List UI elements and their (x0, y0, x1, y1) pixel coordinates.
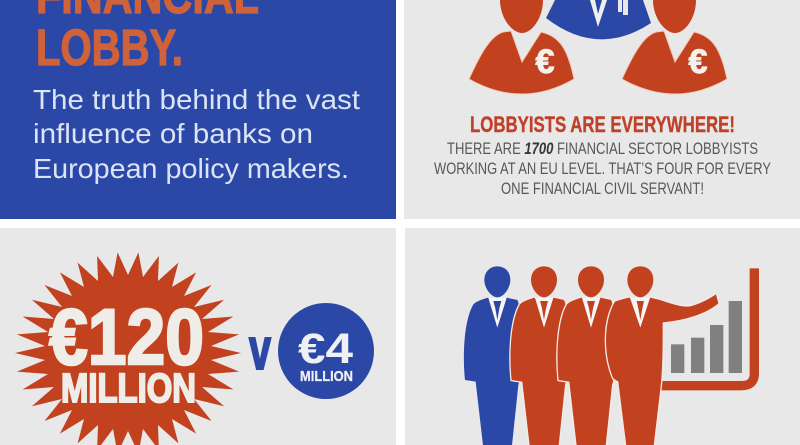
circle: 4 million: MILLION (300, 368, 353, 385)
figures and chart drawing (464, 266, 754, 445)
figure: red lobbyist presenting (606, 266, 718, 445)
circle: 4 million (278, 303, 374, 399)
panel: lobbyists (404, 0, 800, 219)
icon: right lobbyist (622, 0, 727, 94)
panel: lobbyists and chart (405, 228, 800, 445)
versus label: v (249, 317, 271, 382)
figure: red lobbyist two (558, 266, 616, 445)
figure: red lobbyist one (511, 266, 569, 445)
circle: 4 million: €4 (298, 325, 353, 373)
heading: financial lobby (36, 0, 259, 76)
chart frame (653, 268, 754, 386)
bar chart (671, 301, 742, 373)
icon: left lobbyist (469, 0, 574, 94)
starburst: 120 million (15, 252, 241, 445)
panel: spending comparison (0, 228, 396, 445)
figure: blue civil servant (464, 266, 522, 445)
subtitle text: The truth behind the vast (33, 84, 360, 115)
starburst: 120 million: €120 (49, 292, 204, 381)
body text (434, 139, 771, 198)
icon: civil servant (546, 0, 651, 39)
icon: left lobbyist: € (536, 43, 555, 81)
heading: financial lobby: LOBBY. (36, 19, 183, 76)
subtitle text (33, 84, 360, 184)
subtitle text: influence of banks on (33, 118, 313, 149)
body text: ONE FINANCIAL CIVIL SERVANT! (501, 179, 704, 198)
icon: right lobbyist: € (689, 43, 708, 81)
panel: title (0, 0, 396, 219)
starburst: 120 million: MILLION (61, 365, 196, 411)
subtitle text: European policy makers. (33, 153, 349, 184)
